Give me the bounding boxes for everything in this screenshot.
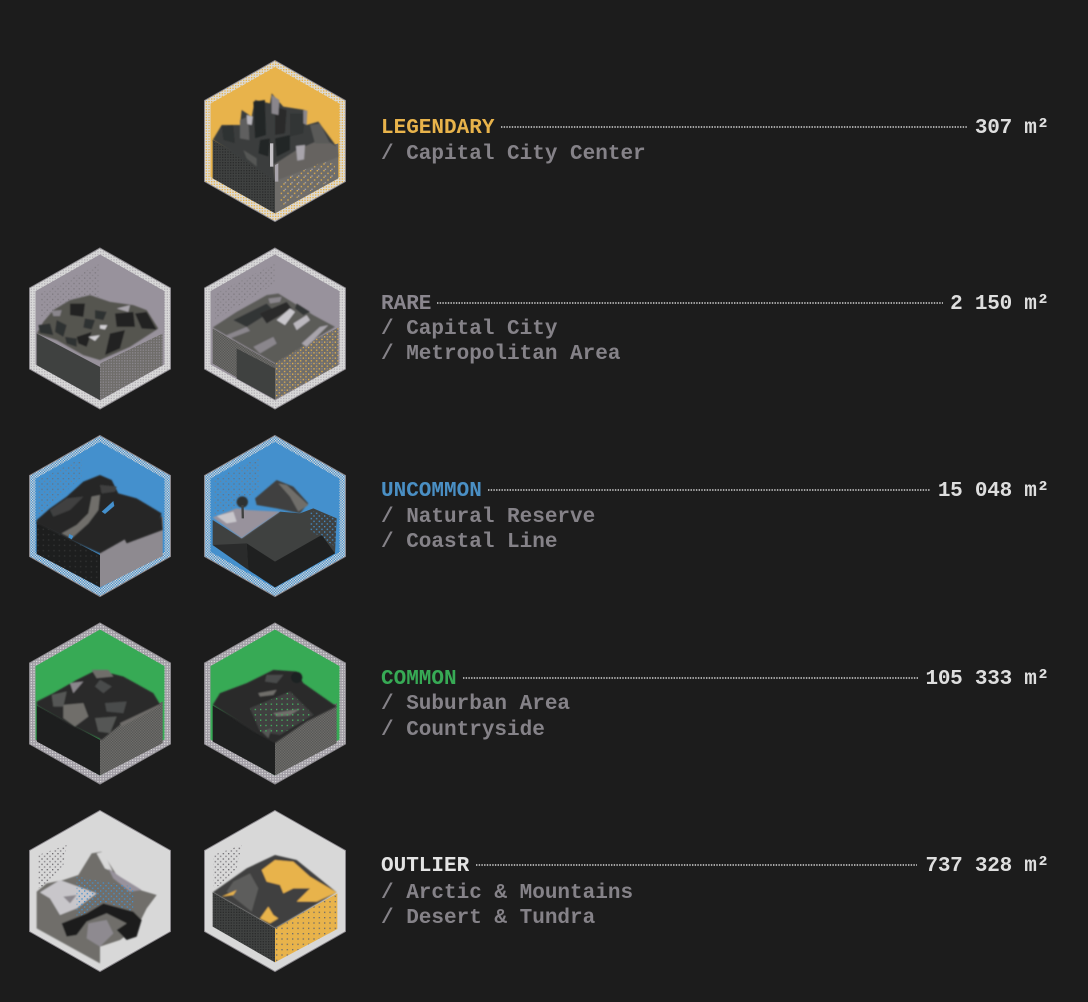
subtitle: arctic and mountains: / Arctic & Mountains bbox=[381, 882, 633, 905]
icon: natural reserve terrain hexagon bbox=[30, 436, 170, 596]
row: rare bbox=[30, 248, 1049, 409]
value: 2 150 m²: 2 150 m² bbox=[950, 293, 1049, 316]
subtitle: capital city center: / Capital City Center bbox=[381, 143, 646, 166]
icon: coastal line terrain hexagon bbox=[205, 436, 345, 596]
row: outlier bbox=[30, 811, 1049, 971]
dotted leader: legendary bbox=[501, 126, 968, 128]
subtitle: countryside: / Countryside bbox=[381, 719, 545, 742]
label: rare: RARE bbox=[381, 293, 431, 316]
icon: suburban area terrain hexagon bbox=[30, 623, 170, 784]
row: legendary bbox=[205, 61, 1049, 221]
icon: capital city terrain hexagon bbox=[30, 248, 170, 409]
dotted leader: common bbox=[463, 677, 918, 679]
subtitle: desert and tundra: / Desert & Tundra bbox=[381, 907, 596, 930]
dotted leader: rare bbox=[437, 302, 943, 304]
row: common bbox=[30, 623, 1049, 784]
icon: metropolitan area terrain hexagon bbox=[205, 248, 345, 409]
subtitle: natural reserve: / Natural Reserve bbox=[381, 506, 595, 529]
subtitle: metropolitan area: / Metropolitan Area bbox=[381, 343, 621, 366]
value: 15 048 m²: 15 048 m² bbox=[938, 480, 1049, 503]
row: uncommon bbox=[30, 436, 1049, 596]
icon: arctic and mountains terrain hexagon bbox=[30, 811, 170, 971]
label: outlier: OUTLIER bbox=[381, 855, 470, 878]
value: 737 328 m²: 737 328 m² bbox=[925, 855, 1049, 878]
icon: capital city center terrain hexagon bbox=[205, 61, 345, 221]
icon: countryside terrain hexagon bbox=[205, 623, 345, 784]
dotted leader: uncommon bbox=[488, 489, 930, 491]
icon: desert and tundra terrain hexagon bbox=[205, 811, 345, 971]
value: 307 m²: 307 m² bbox=[975, 117, 1049, 140]
value: 105 333 m²: 105 333 m² bbox=[925, 668, 1049, 691]
subtitle: suburban area: / Suburban Area bbox=[381, 693, 570, 716]
label: common: COMMON bbox=[381, 668, 457, 691]
label: uncommon: UNCOMMON bbox=[381, 480, 482, 503]
label: legendary: LEGENDARY bbox=[381, 117, 495, 140]
subtitle: capital city: / Capital City bbox=[381, 318, 558, 341]
dotted leader: outlier bbox=[476, 864, 917, 866]
subtitle: coastal line: / Coastal Line bbox=[381, 531, 557, 554]
